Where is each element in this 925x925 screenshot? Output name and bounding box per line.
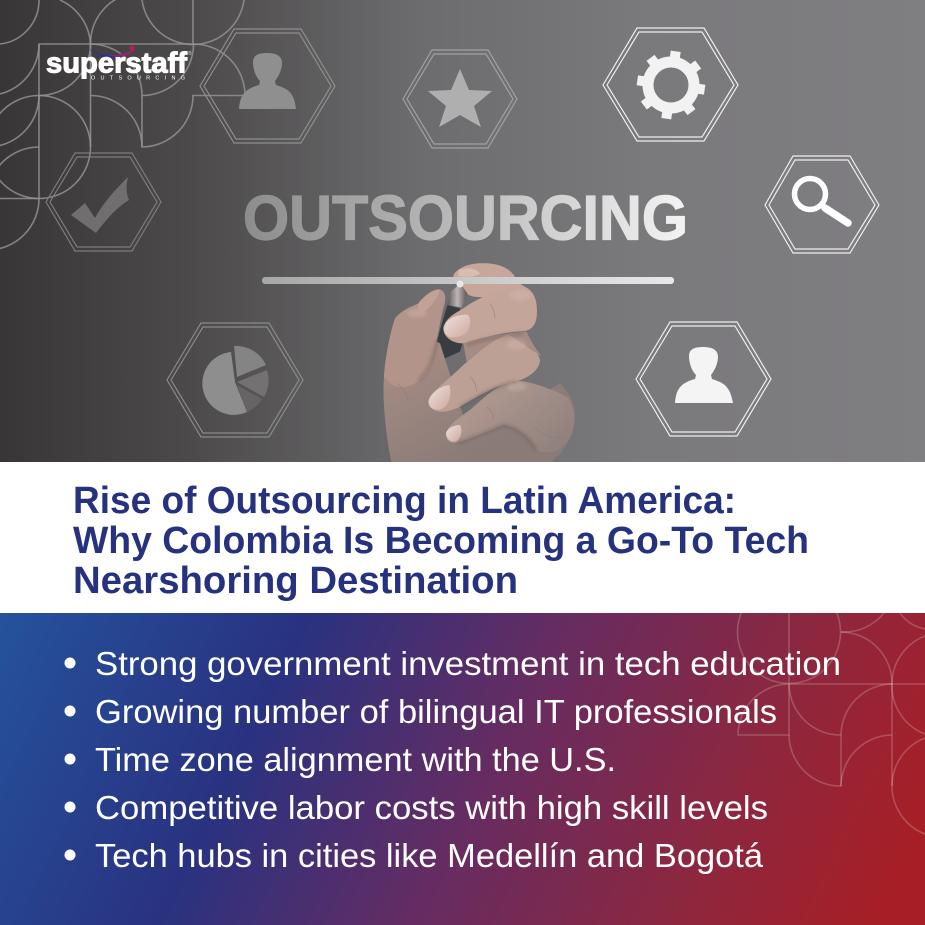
bullet 5: Tech hubs in cities like Medellín and Bogotá xyxy=(95,837,764,874)
middle finger xyxy=(443,286,537,343)
palm under knuckles xyxy=(463,332,542,362)
heading: title xyxy=(73,480,809,602)
heading: title: Why Colombia Is Becoming a Go-To Tech xyxy=(73,520,809,562)
illustration: hand holding pen xyxy=(383,263,575,463)
icon: check mark hexagon xyxy=(46,153,161,251)
ring finger xyxy=(428,334,540,412)
icon: magnifier hexagon xyxy=(765,156,879,253)
bullet 3: Time zone alignment with the U.S. xyxy=(95,741,616,778)
heading: OUTSOURCING word: OUTSOURCING xyxy=(243,184,688,254)
creases xyxy=(397,303,563,438)
icon: person hexagon bright xyxy=(636,322,771,436)
pen xyxy=(433,283,467,359)
panel: gradient bullet section xyxy=(0,613,925,925)
heading: title: Rise of Outsourcing in Latin America: xyxy=(73,480,736,522)
pinky finger xyxy=(446,381,574,453)
bullet 4: Competitive labor costs with high skill levels xyxy=(95,789,768,826)
soft finger shadows xyxy=(418,333,537,450)
logo swoosh xyxy=(86,45,136,58)
thumb xyxy=(384,289,445,387)
hand back xyxy=(383,318,575,463)
pen tip glint xyxy=(456,280,464,288)
icon: pie chart hexagon xyxy=(167,323,303,437)
icon: person hexagon xyxy=(200,29,335,143)
knuckle highlights xyxy=(407,290,532,391)
heading: title: Nearshoring Destination xyxy=(73,560,518,602)
decorative pattern: bottom-right line art xyxy=(736,613,925,835)
underline bar xyxy=(262,277,674,284)
panel: hero photo background xyxy=(0,0,925,462)
logo: Superstaff Outsourcing: OUTSOURCING xyxy=(91,76,185,82)
logo: Superstaff Outsourcing: ® xyxy=(188,50,192,57)
finger nails xyxy=(417,268,480,442)
panel: title band xyxy=(0,462,925,613)
icon: gear hexagon xyxy=(603,28,738,141)
logo: Superstaff Outsourcing: superstaff xyxy=(46,48,187,80)
icon: star hexagon xyxy=(403,50,517,148)
bullet 2: Growing number of bilingual IT professionals xyxy=(95,693,777,730)
top finger behind the bar xyxy=(453,263,530,300)
bullet 1: Strong government investment in tech education xyxy=(95,645,841,682)
bullet list xyxy=(64,645,841,874)
decorative pattern: top-left line art xyxy=(0,0,245,250)
